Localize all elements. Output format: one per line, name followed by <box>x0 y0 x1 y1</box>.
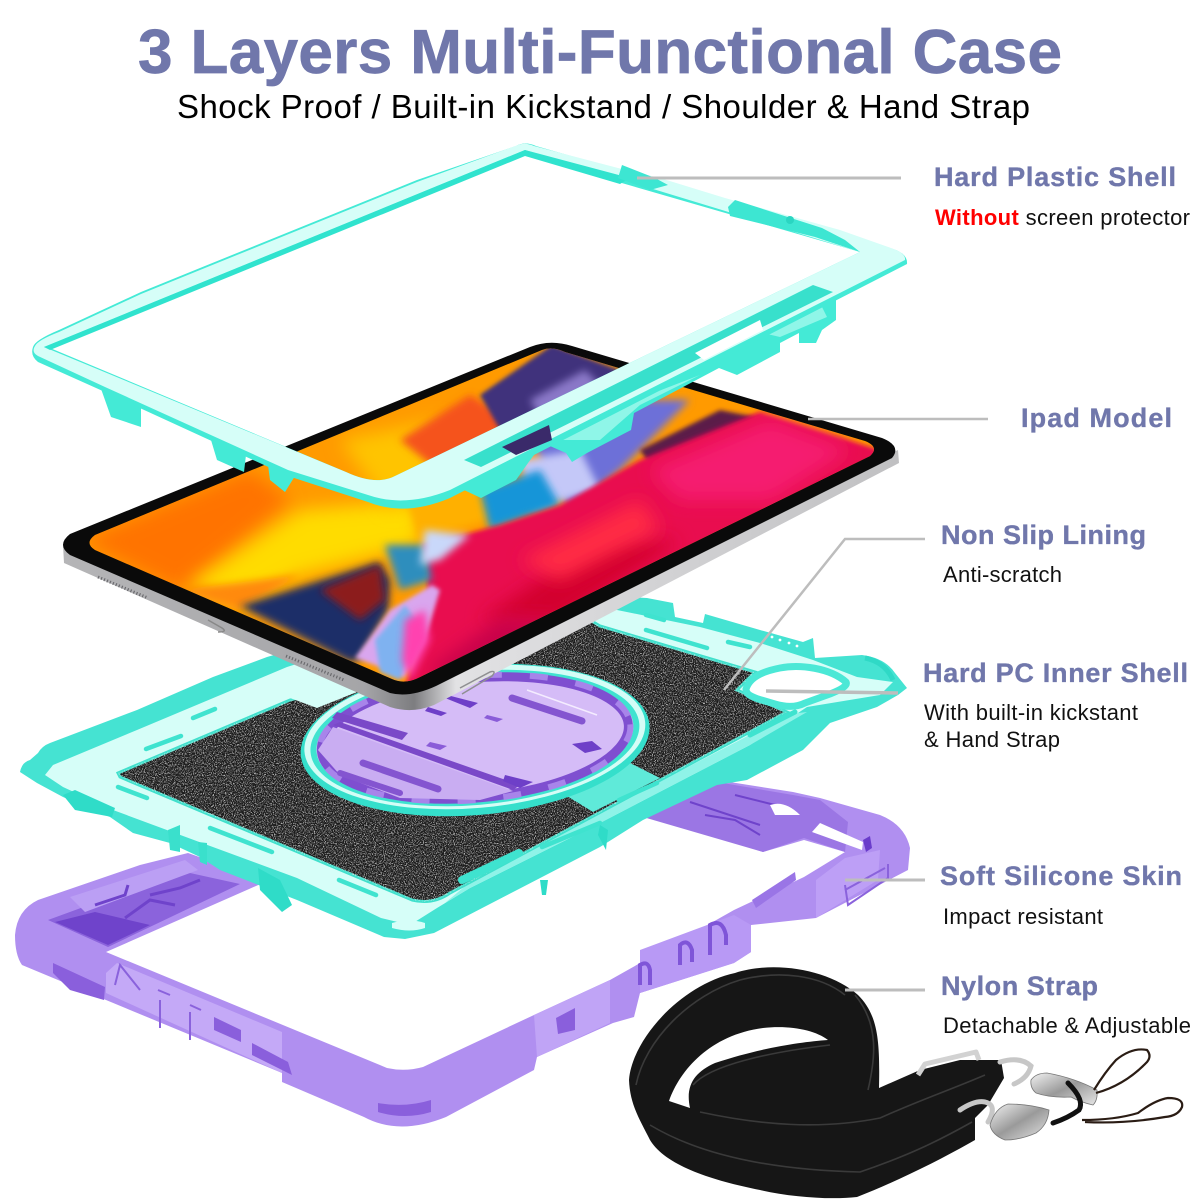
leader line: hard plastic shell <box>637 176 901 180</box>
label: hard pc inner shell: & Hand Strap <box>924 727 1060 752</box>
shell slots <box>118 615 795 895</box>
label: nylon strap: Nylon Strap <box>941 971 1098 1001</box>
label: soft silicone skin: Soft Silicone Skin <box>940 861 1182 891</box>
leader line: nylon strap <box>845 988 925 992</box>
leader line: non slip lining <box>724 539 925 690</box>
label: hard pc inner shell <box>923 658 1188 752</box>
label: hard plastic shell: Without screen protector <box>935 205 1190 230</box>
non-slip black lining <box>110 610 800 910</box>
title: 3 Layers Multi-Functional Case <box>138 18 1062 87</box>
camera cutout <box>746 667 846 706</box>
soft silicone skin <box>15 780 910 1126</box>
leader line: soft silicone skin <box>845 878 925 882</box>
screen wallpaper <box>90 348 874 682</box>
ipad model <box>60 330 900 710</box>
label: nylon strap <box>941 971 1191 1038</box>
label: soft silicone skin: Impact resistant <box>943 904 1103 929</box>
buckle and clasps <box>918 1052 1097 1140</box>
kickstand disc <box>294 650 656 830</box>
cord loops <box>1082 1049 1182 1122</box>
label: nylon strap: Detachable & Adjustable <box>943 1013 1191 1038</box>
label: non slip lining: Non Slip Lining <box>941 520 1146 550</box>
label: hard pc inner shell: Hard PC Inner Shell <box>923 658 1188 688</box>
leader line: ipad model <box>808 418 988 420</box>
label: non slip lining: Anti-scratch <box>943 562 1062 587</box>
label: non slip lining <box>941 520 1146 587</box>
hard plastic shell <box>32 144 907 509</box>
label: hard pc inner shell: With built-in kickstant <box>924 700 1138 725</box>
leader line: hard pc inner shell <box>766 691 898 693</box>
label: hard plastic shell <box>934 162 1190 230</box>
nylon strap <box>629 967 1182 1198</box>
label: ipad model: Ipad Model <box>1021 403 1172 433</box>
label: hard plastic shell: Hard Plastic Shell <box>934 162 1176 192</box>
subtitle: Shock Proof / Built-in Kickstand / Shoulder & Hand Strap <box>177 88 1030 125</box>
hard PC inner shell <box>20 590 907 939</box>
label: soft silicone skin <box>940 861 1182 929</box>
